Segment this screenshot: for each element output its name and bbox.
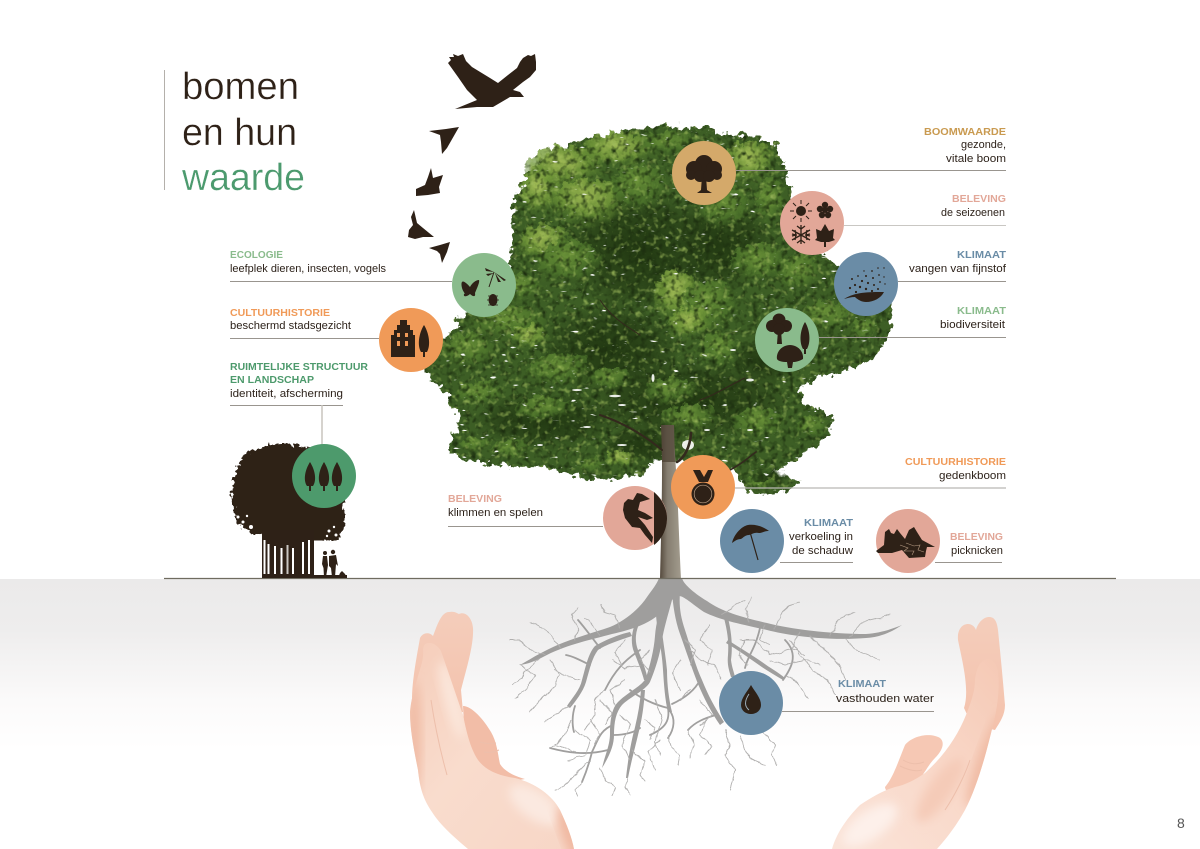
soil gradient band bbox=[0, 579, 1200, 749]
icon: climbing bbox=[603, 486, 667, 550]
tree trunk bbox=[660, 425, 681, 579]
icon: insects bbox=[452, 253, 516, 317]
silhouette trunks bbox=[262, 530, 347, 578]
house windows bbox=[397, 333, 408, 346]
maple leaf bbox=[815, 224, 835, 247]
beetle bbox=[487, 294, 499, 306]
label: boomwaarde: BOOMWAARDE bbox=[924, 126, 1006, 138]
label: klimaat verkoeling: KLIMAAT bbox=[804, 517, 854, 529]
label: boomwaarde: gezonde, bbox=[961, 139, 1006, 151]
label: ruimtelijke structuur: identiteit, afscherming bbox=[230, 388, 343, 400]
sun bbox=[790, 200, 812, 222]
label: klimaat biodiversiteit: biodiversiteit bbox=[940, 319, 1005, 331]
leaf bbox=[844, 292, 884, 302]
label: klimaat water: vasthouden water bbox=[836, 693, 934, 705]
medium roots bbox=[550, 620, 793, 782]
house bbox=[391, 320, 415, 357]
label: klimaat verkoeling bbox=[789, 517, 854, 557]
icon: three trees bbox=[292, 444, 356, 508]
label: ecologie bbox=[230, 249, 386, 275]
gaps between the leaves bbox=[537, 349, 754, 450]
label: klimaat verkoeling: de schaduw bbox=[792, 545, 853, 557]
icon: medal bbox=[671, 455, 735, 519]
icon: water drop bbox=[719, 671, 783, 735]
label: klimaat fijnstof: vangen van fijnstof bbox=[909, 263, 1007, 275]
fine root twigs bbox=[510, 598, 890, 796]
label: beleving seizoenen: de seizoenen bbox=[941, 207, 1005, 219]
flower bbox=[817, 202, 833, 218]
icon: fine dust on leaf bbox=[834, 252, 898, 316]
label: klimaat biodiversiteit: KLIMAAT bbox=[957, 305, 1007, 317]
icon: boomwaarde tree bbox=[672, 141, 736, 205]
tree branches bbox=[600, 300, 756, 470]
silhouette canopy bbox=[232, 444, 345, 541]
label: ruimtelijke structuur: RUIMTELIJKE STRUCTUUR bbox=[230, 361, 368, 373]
title bbox=[164, 66, 305, 199]
label: cultuurhistorie gedenkboom: gedenkboom bbox=[939, 470, 1006, 482]
bird 4 bbox=[408, 210, 434, 239]
poplar bbox=[801, 322, 809, 354]
dark top of trunk bbox=[661, 425, 675, 462]
mushroom-shaped tree bbox=[777, 345, 803, 368]
dust particles bbox=[849, 267, 886, 293]
dragonfly bbox=[489, 272, 494, 287]
label: ruimtelijke structuur bbox=[230, 361, 368, 400]
label: beleving picknicken: picknicken bbox=[951, 545, 1003, 557]
tree canopy bbox=[425, 126, 893, 494]
medal disc bbox=[692, 482, 714, 506]
broad tree bbox=[766, 314, 792, 344]
butterfly bbox=[461, 280, 479, 296]
label: klimaat water bbox=[836, 678, 934, 705]
label: cultuurhistorie stadsgezicht: beschermd stadsgezicht bbox=[230, 320, 351, 332]
icon: parasol bbox=[720, 509, 784, 573]
page number: 8 bbox=[1177, 815, 1185, 831]
large bird bbox=[448, 54, 536, 109]
poplar bbox=[419, 325, 429, 357]
title: en hun bbox=[182, 112, 297, 154]
bird 3 bbox=[416, 168, 443, 196]
label: beleving picknicken bbox=[950, 531, 1003, 557]
canopy gaps bbox=[236, 515, 338, 537]
label: cultuurhistorie gedenkboom bbox=[905, 456, 1006, 482]
label: beleving klimmen: klimmen en spelen bbox=[448, 507, 543, 519]
label: cultuurhistorie stadsgezicht: CULTUURHISTORIE bbox=[230, 307, 330, 319]
blanket pattern bbox=[900, 543, 924, 555]
label: boomwaarde: vitale boom bbox=[946, 153, 1006, 165]
flying birds bbox=[408, 54, 536, 263]
icon: picnic bbox=[876, 509, 940, 573]
label: klimaat biodiversiteit bbox=[940, 305, 1007, 331]
ground line bbox=[164, 578, 1116, 580]
label: beleving klimmen bbox=[448, 493, 543, 519]
label: klimaat fijnstof bbox=[909, 249, 1007, 275]
icon: biodiversity bbox=[755, 308, 819, 372]
icon: canal house and tree bbox=[379, 308, 443, 372]
label: ruimtelijke structuur: EN LANDSCHAP bbox=[230, 374, 314, 386]
seated people and blanket bbox=[876, 527, 935, 558]
label: ecologie: ECOLOGIE bbox=[230, 249, 283, 261]
left hand bbox=[407, 612, 588, 849]
tree photo: canopy and trunk bbox=[425, 126, 893, 579]
hands holding the tree bbox=[407, 612, 1010, 849]
climber bbox=[623, 493, 653, 543]
silhouette of tree group with people bbox=[232, 444, 347, 578]
title text: bomen bbox=[182, 66, 299, 108]
icon: seasons bbox=[780, 191, 844, 255]
right hand bbox=[832, 617, 1010, 849]
thick roots bbox=[520, 578, 902, 778]
rock face bbox=[654, 492, 667, 545]
silhouette couple and dog bbox=[322, 550, 347, 578]
label: klimaat fijnstof: KLIMAAT bbox=[957, 249, 1007, 261]
label: beleving seizoenen bbox=[941, 193, 1006, 219]
connector lines bbox=[230, 170, 1006, 712]
tree roots bbox=[510, 578, 902, 796]
title: waarde bbox=[181, 157, 305, 199]
label: beleving seizoenen: BELEVING bbox=[952, 193, 1006, 205]
label: cultuurhistorie stadsgezicht bbox=[230, 307, 351, 332]
label: boomwaarde bbox=[924, 126, 1006, 165]
label: klimaat water: KLIMAAT bbox=[838, 678, 887, 690]
label: beleving picknicken: BELEVING bbox=[950, 531, 1003, 543]
bird 2 bbox=[429, 127, 459, 154]
label: cultuurhistorie gedenkboom: CULTUURHISTORIE bbox=[905, 456, 1006, 468]
bird 5 bbox=[429, 242, 450, 263]
label: beleving klimmen: BELEVING bbox=[448, 493, 502, 505]
label: ecologie: leefplek dieren, insecten, vogels bbox=[230, 263, 386, 275]
snowflake bbox=[792, 225, 810, 244]
title rule bbox=[164, 70, 166, 190]
label: klimaat verkoeling: verkoeling in bbox=[789, 531, 853, 543]
ribbon bbox=[693, 470, 713, 482]
